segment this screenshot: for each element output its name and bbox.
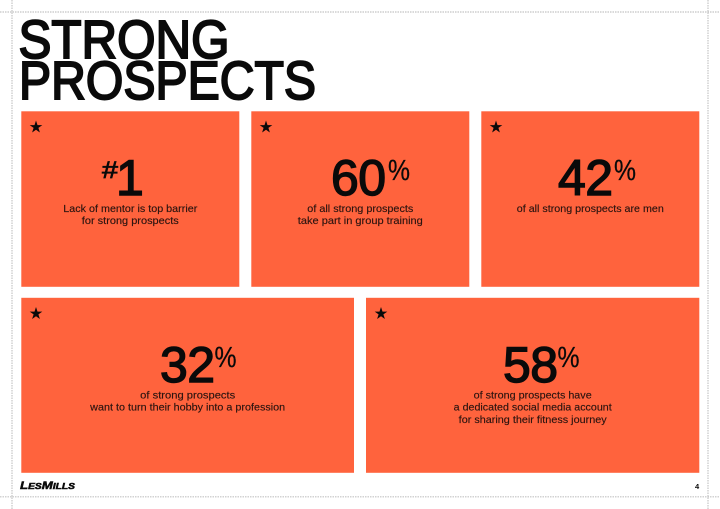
icon: star [260,120,272,132]
stat: 42%: % [614,155,636,187]
description: of all strong prospects are men [517,203,664,215]
description [89,390,285,414]
description [63,203,198,227]
description: of strong prospects have [474,390,592,402]
title [18,10,316,111]
stat: 58%: % [558,342,580,374]
panel: 58% social media [366,298,699,473]
icon: star [375,307,387,319]
icon: star [30,120,42,132]
description: a dedicated social media account [454,402,612,414]
stat: 32%: % [214,342,236,374]
icon: star [490,120,502,132]
title: PROSPECTS [19,51,316,111]
panel: #1 mentor barrier [21,111,239,287]
description: of strong prospects [140,390,235,402]
title: STRONG [18,10,230,70]
page number: 4 [695,482,700,491]
description: for strong prospects [82,215,179,227]
panel: 42% men [481,111,699,287]
description: of all strong prospects [307,203,413,215]
description [298,203,423,227]
stat: 60%: % [388,155,410,187]
stat: 58%: 58 [503,337,558,393]
description: want to turn their hobby into a profession [89,402,285,414]
panel: 32% hobby [21,298,354,473]
stat: #1: # [102,157,119,184]
stat: 42%: 42 [558,150,613,206]
stat: 60%: 60 [331,150,386,206]
stat: 60% [331,150,410,206]
description [454,390,612,426]
description: take part in group training [298,215,423,227]
logo: LESMILLS [20,480,75,492]
panel: 60% group training [251,111,469,287]
stat: 32%: 32 [160,337,215,393]
description: for sharing their fitness journey [459,414,607,426]
stat: #1: 1 [116,150,144,206]
icon: star [30,307,42,319]
description: Lack of mentor is top barrier [63,203,198,215]
stat: #1 [102,150,144,206]
